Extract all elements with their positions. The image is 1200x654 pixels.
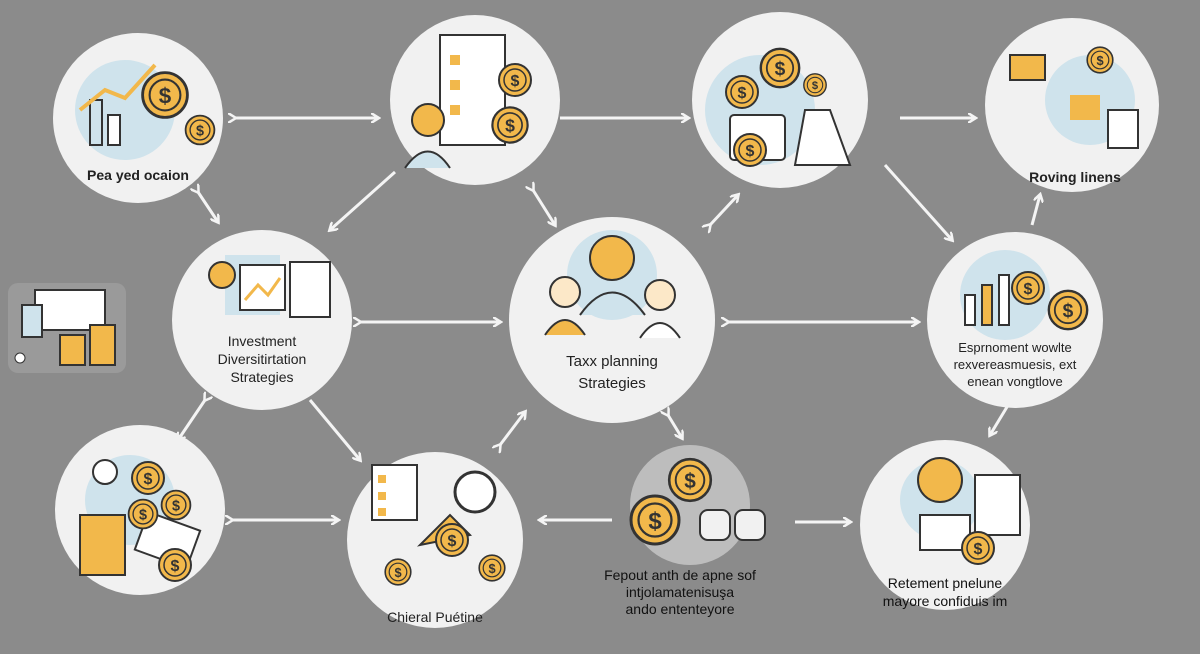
circle 6 center [509,217,715,423]
bottom middle group: ando ententeyore [626,601,735,617]
left coin stack icon [8,283,126,373]
circle 2 [390,15,560,185]
bottom middle group: Fepout anth de apne sof [604,567,756,583]
circle 1: Pea yed ocaion [87,167,189,183]
circle 7: enean vongtlove [967,374,1063,389]
circle 9: Chieral Puétine [387,609,483,625]
circle 5: Strategies [230,369,294,385]
circle 3 [692,12,868,188]
circle 11: Retement pnelune [888,575,1002,591]
circle 7 [927,232,1103,408]
circle 11: mayore confiduis im [883,593,1007,609]
circle 7: rexvereasmuesis, ext [954,357,1077,372]
circle 4 [985,18,1159,192]
arrows [178,118,918,520]
bottom middle group: intjolamatenisuşa [626,584,734,600]
circle 9 [347,452,523,628]
circle 6 center: Strategies [578,375,646,392]
circle 4: Roving linens [1029,169,1121,185]
circle 5: Diversitirtation [218,351,306,367]
circle 5 [172,230,352,410]
circle 5: Investment [228,333,296,349]
circle 8 [55,425,225,595]
circle 11 [860,440,1030,610]
circle 6 center: Taxx planning [566,353,658,370]
circle 7: Esprnoment wowlte [958,340,1072,355]
bottom middle group [604,445,765,617]
circle 1 [53,33,223,203]
